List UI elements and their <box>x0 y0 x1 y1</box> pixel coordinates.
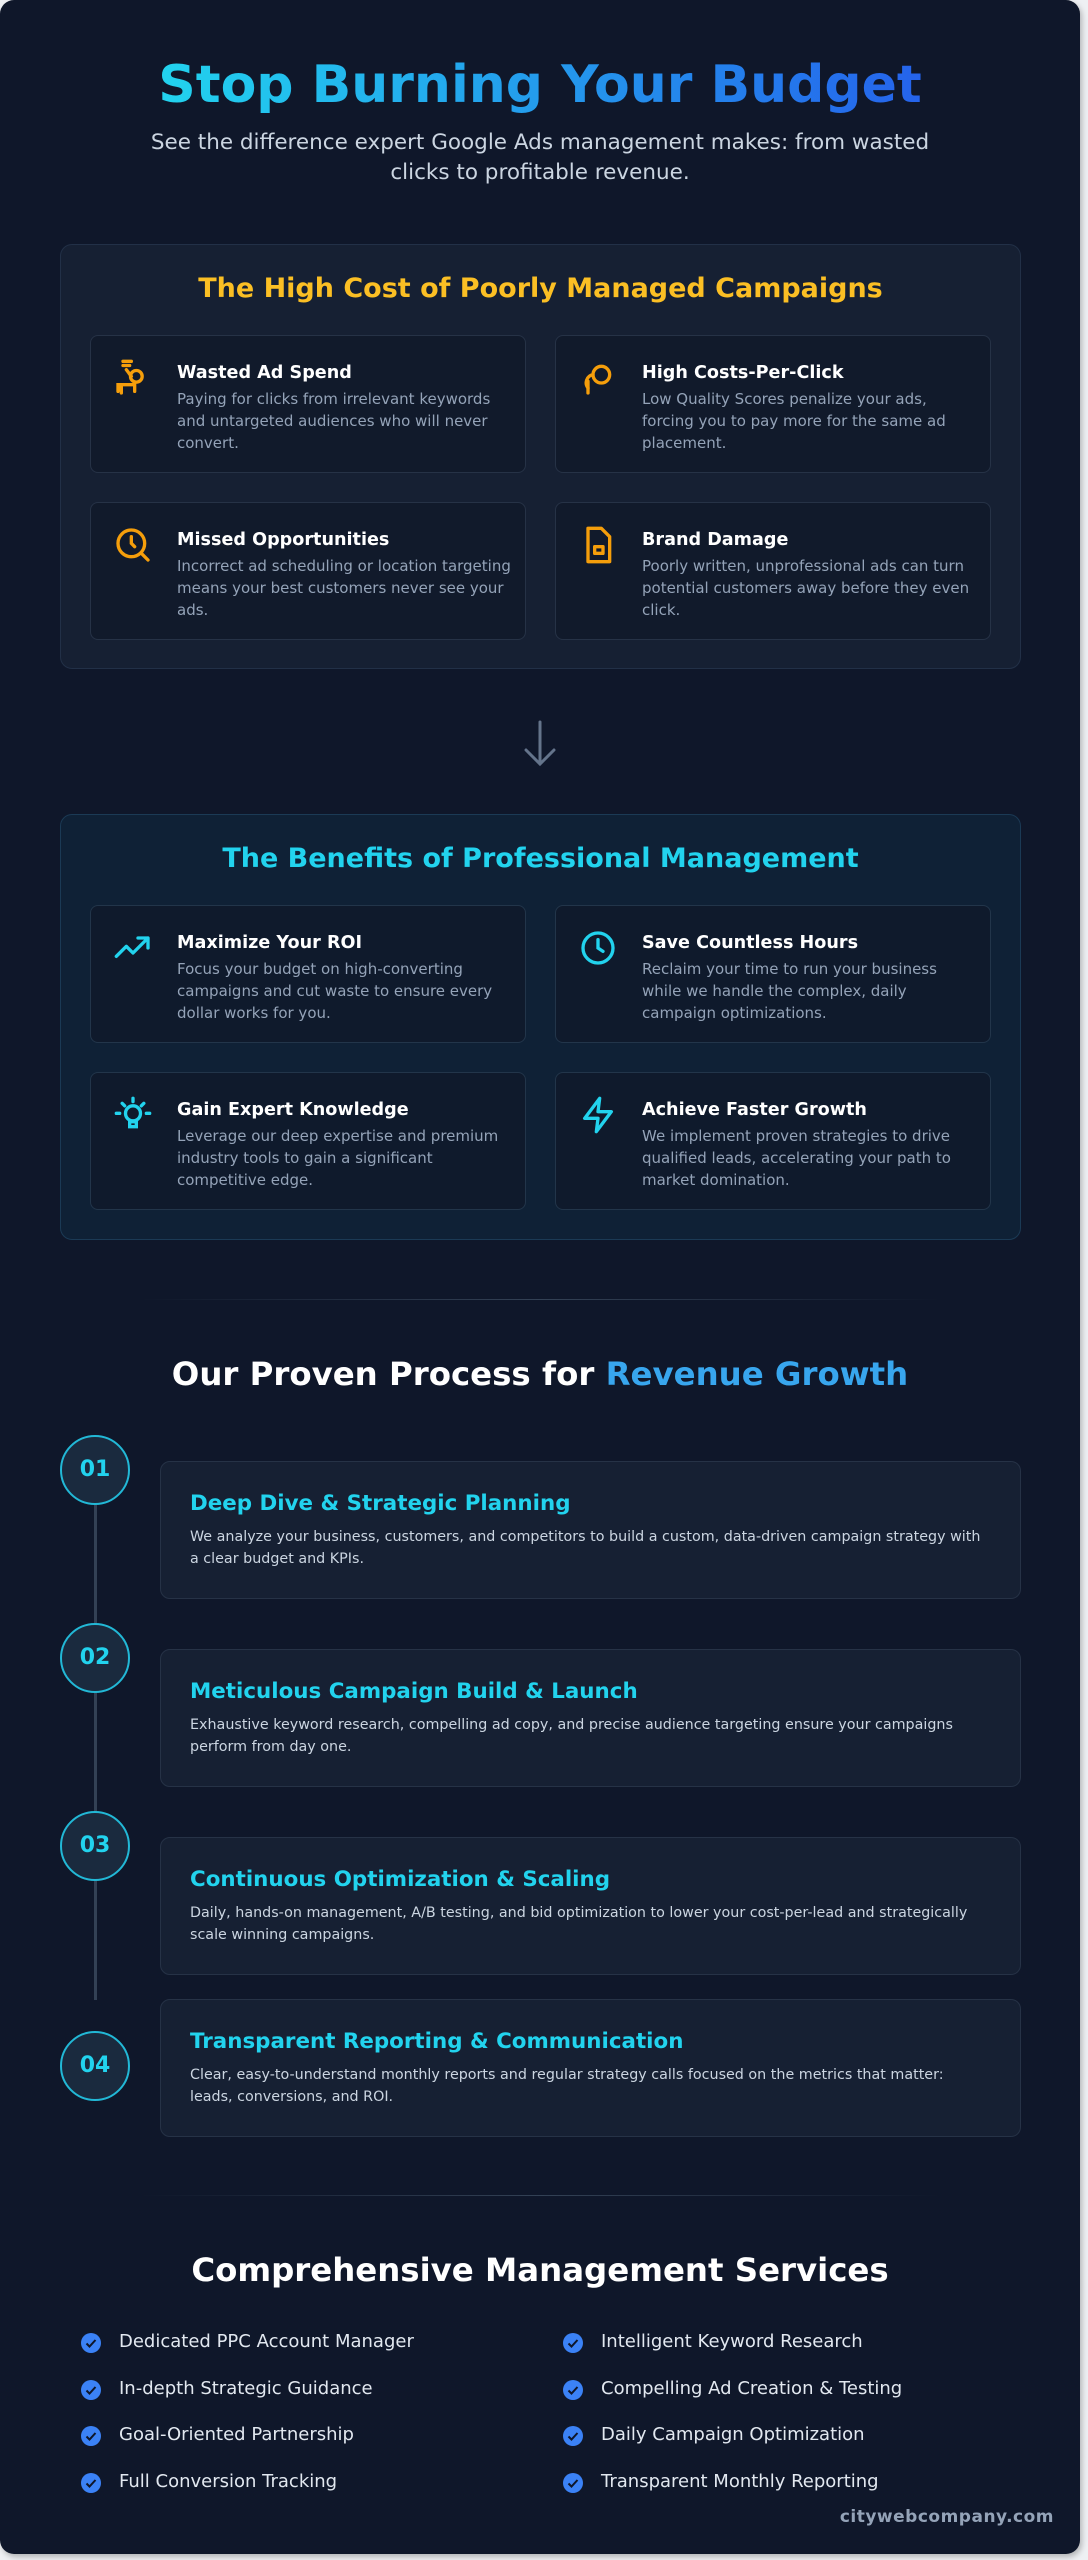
card: roi <box>90 905 526 1043</box>
icon: hand coin <box>116 360 144 395</box>
services list: Goal-Oriented Partnership <box>119 2424 354 2445</box>
step circle 04 <box>60 2031 130 2101</box>
subtitle: See the difference expert Google Ads management makes: from wasted clicks to profitable revenue. <box>151 130 929 185</box>
heading: services: Comprehensive Management Services <box>191 2251 889 2289</box>
step card 4 <box>160 1999 1021 2137</box>
card: save hours <box>555 905 991 1043</box>
icon: clock search <box>116 528 150 562</box>
icon: bulb <box>114 1096 152 1128</box>
item <box>81 2331 414 2353</box>
step card 3: Daily, hands-on management, A/B testing, and bid optimization to lower your cost-per-lead and strategically scale winning campaigns. <box>190 1905 967 1943</box>
step card 1 <box>160 1461 1021 1599</box>
card: expert knowledge: Gain Expert Knowledge <box>177 1100 409 1120</box>
card: missed opportunities <box>90 502 526 640</box>
item <box>563 2424 865 2446</box>
card: growth: We implement proven strategies to drive qualified leads, accelerating your path to market domination. <box>642 1127 951 1189</box>
step circle 01: 01 <box>80 1457 110 1482</box>
step card 2 <box>160 1649 1021 1787</box>
card: wasted ad spend <box>90 335 526 473</box>
heading: process: Our Proven Process for Revenue Growth <box>172 1355 908 1393</box>
heading: benefits: The Benefits of Professional Management <box>222 843 859 874</box>
card: expert knowledge: Leverage our deep expertise and premium industry tools to gain a significant competitive edge. <box>177 1127 498 1189</box>
panel: high cost <box>60 244 1021 669</box>
heading: high cost: The High Cost of Poorly Managed Campaigns <box>198 273 883 304</box>
services list <box>81 2331 902 2493</box>
item <box>563 2471 879 2493</box>
card: high cpc: Low Quality Scores penalize your ads, forcing you to pay more for the same ad placement. <box>642 390 946 452</box>
timeline line <box>94 1505 97 2000</box>
step card 4: Clear, easy-to-understand monthly reports and regular strategy calls focused on the metrics that matter: leads, conversions, and ROI. <box>190 2067 944 2105</box>
arrow down <box>524 720 556 766</box>
card: save hours: Reclaim your time to run your business while we handle the complex, daily campaign optimizations. <box>642 960 937 1022</box>
icon: lightning <box>582 1096 614 1134</box>
step circle 02 <box>60 1623 130 1693</box>
card: high cpc <box>555 335 991 473</box>
item <box>563 2331 863 2353</box>
icon: file <box>586 526 612 564</box>
services list: Transparent Monthly Reporting <box>601 2471 879 2492</box>
services list: Compelling Ad Creation & Testing <box>601 2378 902 2399</box>
step circle 03 <box>60 1811 130 1881</box>
services list: Intelligent Keyword Research <box>601 2331 863 2352</box>
step card 1: Deep Dive & Strategic Planning <box>190 1491 571 1516</box>
card: roi: Maximize Your ROI <box>177 933 362 953</box>
item <box>81 2378 373 2400</box>
card: brand damage: Brand Damage <box>642 530 788 550</box>
footer brand: citywebcompany.com <box>840 2507 1054 2527</box>
step circle 04: 04 <box>80 2053 110 2078</box>
item <box>81 2424 354 2446</box>
card: expert knowledge <box>90 1072 526 1210</box>
icon: trend up <box>114 936 150 958</box>
step circle 02: 02 <box>80 1645 110 1670</box>
step card 3: Continuous Optimization & Scaling <box>190 1867 610 1892</box>
card: growth <box>555 1072 991 1210</box>
card: save hours: Save Countless Hours <box>642 933 858 953</box>
card: roi: Focus your budget on high-converting campaigns and cut waste to ensure every dollar works for you. <box>177 960 492 1022</box>
card: missed opportunities: Incorrect ad scheduling or location targeting means your best customers never see your ads. <box>177 557 511 619</box>
services list: Full Conversion Tracking <box>119 2471 337 2492</box>
card: brand damage: Poorly written, unprofessional ads can turn potential customers away before they even click. <box>642 557 969 619</box>
title: Stop Burning Your Budget <box>158 55 922 115</box>
card: missed opportunities: Missed Opportunities <box>177 530 389 550</box>
panel: benefits <box>60 814 1021 1240</box>
services list: Dedicated PPC Account Manager <box>119 2331 414 2352</box>
step card 3 <box>160 1837 1021 1975</box>
card: wasted ad spend: Paying for clicks from irrelevant keywords and untargeted audiences who will never convert. <box>177 390 490 452</box>
card: brand damage <box>555 502 991 640</box>
icon: clock <box>581 931 615 965</box>
item <box>563 2378 902 2400</box>
step card 2: Exhaustive keyword research, compelling ad copy, and precise audience targeting ensure your campaigns perform from day one. <box>190 1717 953 1755</box>
step circle 03: 03 <box>80 1833 110 1858</box>
services list: Daily Campaign Optimization <box>601 2424 865 2445</box>
step card 4: Transparent Reporting & Communication <box>190 2029 683 2054</box>
card: growth: Achieve Faster Growth <box>642 1100 867 1120</box>
step card 2: Meticulous Campaign Build & Launch <box>190 1679 638 1704</box>
icon: coins <box>584 364 612 395</box>
services list: In-depth Strategic Guidance <box>119 2378 373 2399</box>
step card 1: We analyze your business, customers, and competitors to build a custom, data-driven campaign strategy with a clear budget and KPIs. <box>190 1529 980 1567</box>
step circle 01 <box>60 1435 130 1505</box>
card: high cpc: High Costs-Per-Click <box>642 363 844 383</box>
card: wasted ad spend: Wasted Ad Spend <box>177 363 352 383</box>
item <box>81 2471 337 2493</box>
